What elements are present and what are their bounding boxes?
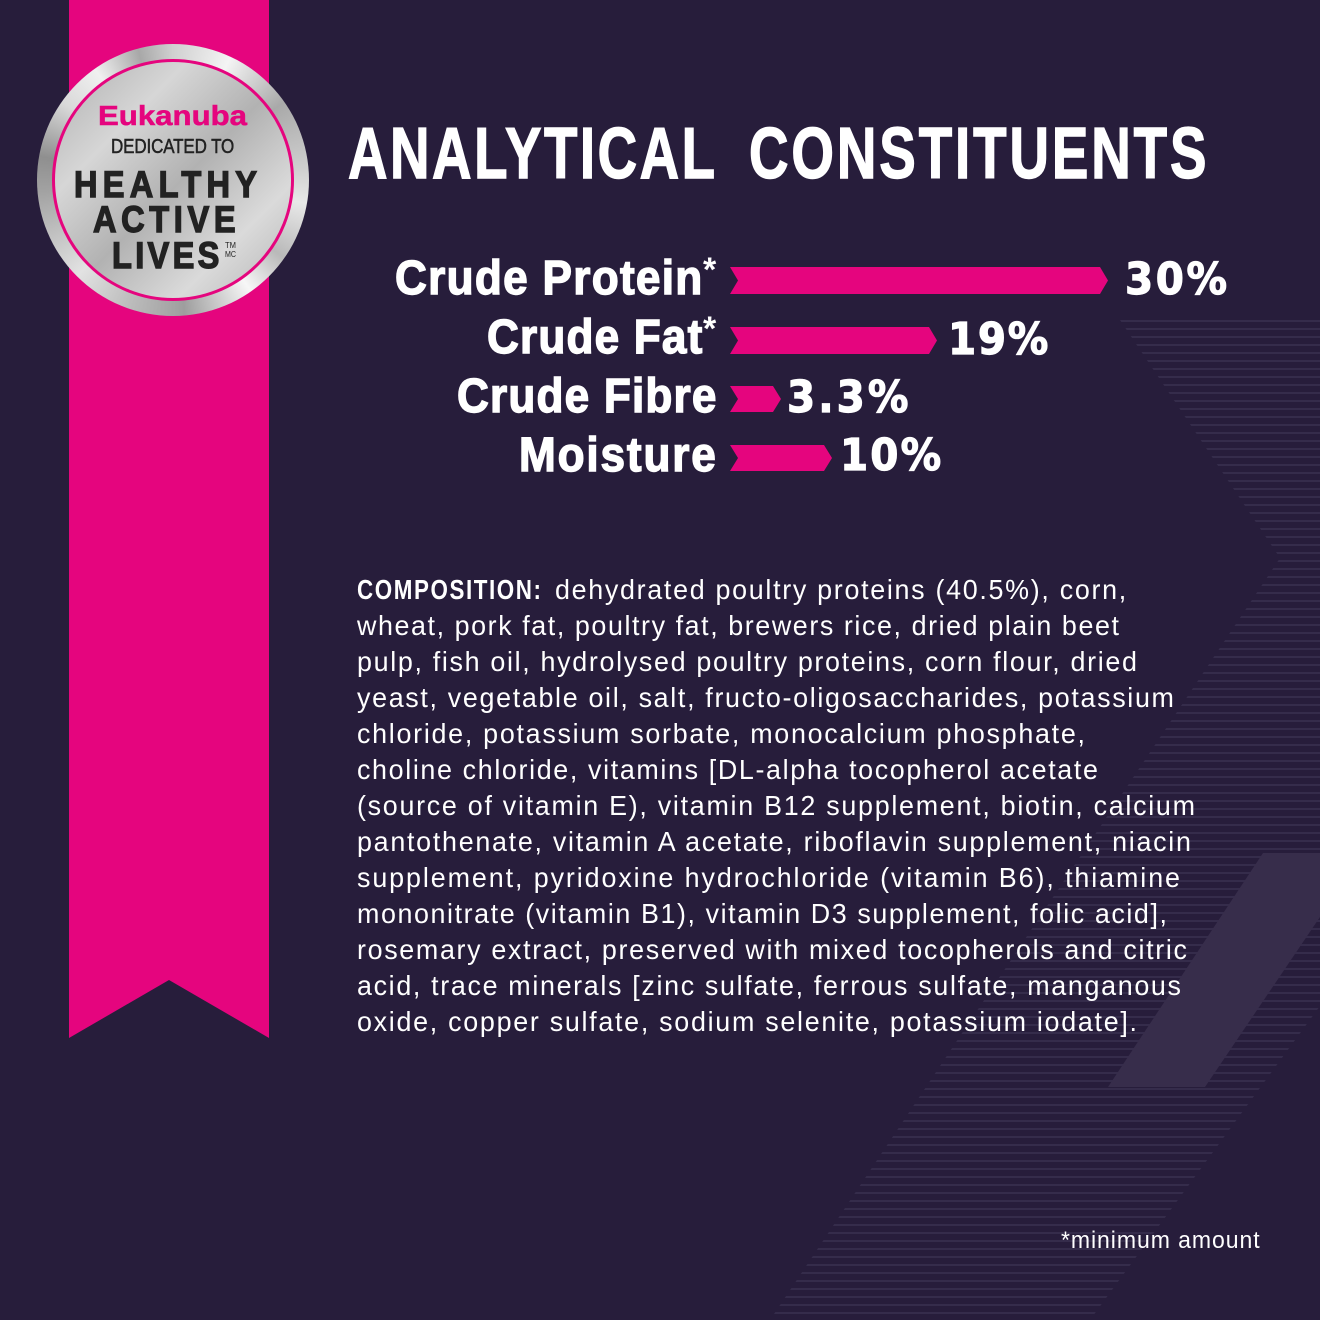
row: crude protein: 30% [1125, 253, 1227, 304]
row: crude protein [395, 250, 1227, 304]
composition text block: dehydrated poultry proteins (40.5%), corn, [555, 573, 1126, 605]
tagline: MC [225, 250, 236, 259]
tagline: TM [225, 241, 236, 250]
row: crude fat: * [703, 310, 717, 348]
row: crude fibre [457, 368, 908, 422]
brand name: Eukanuba [98, 100, 247, 131]
composition text block: wheat, pork fat, poultry fat, brewers rice, dried plain beet [356, 609, 1119, 641]
row: crude fat [487, 309, 1048, 364]
composition text block: chloride, potassium sorbate, monocalcium phosphate, [357, 717, 1085, 749]
row: crude fibre: Crude Fibre [457, 368, 716, 422]
row: moisture: 10% [840, 429, 941, 480]
tagline: DEDICATED TO [111, 135, 234, 157]
footnote: *minimum amount [1061, 1227, 1260, 1253]
tagline: HEALTHY [74, 164, 257, 205]
composition text block: oxide, copper sulfate, sodium selenite, potassium iodate]. [357, 1005, 1137, 1037]
title: ANALYTICAL [348, 113, 715, 194]
silver badge [37, 44, 309, 316]
composition text block: supplement, pyridoxine hydrochloride (vitamin B6), thiamine [357, 861, 1180, 893]
title [348, 113, 1207, 194]
composition text block: pantothenate, vitamin A acetate, riboflavin supplement, niacin [357, 825, 1191, 857]
tagline: ACTIVE [93, 199, 236, 240]
row: crude fibre: 3.3% [787, 371, 908, 422]
row: crude protein: Crude Protein [395, 250, 702, 304]
composition text block: mononitrate (vitamin B1), vitamin D3 supplement, folic acid], [357, 897, 1167, 929]
composition text block: acid, trace minerals [zinc sulfate, ferrous sulfate, manganous [357, 969, 1181, 1001]
composition text block: yeast, vegetable oil, salt, fructo-oligosaccharides, potassium [357, 681, 1174, 713]
row: crude fat: 19% [948, 313, 1048, 364]
title: CONSTITUENTS [749, 113, 1207, 194]
composition text block: pulp, fish oil, hydrolysed poultry proteins, corn flour, dried [357, 645, 1137, 677]
row: moisture: Moisture [519, 427, 716, 481]
tagline [74, 135, 257, 276]
row: moisture [519, 427, 941, 481]
composition text block: (source of vitamin E), vitamin B12 supplement, biotin, calcium [357, 789, 1195, 821]
constituents bar chart [395, 250, 1227, 481]
tagline: LIVES [112, 235, 219, 276]
row: crude protein: * [703, 251, 717, 289]
composition text block: choline chloride, vitamins [DL-alpha tocopherol acetate [357, 753, 1098, 785]
row: crude fat: Crude Fat [487, 309, 702, 363]
composition text block: COMPOSITION: [357, 575, 541, 606]
composition text block: rosemary extract, preserved with mixed tocopherols and citric [357, 933, 1187, 965]
